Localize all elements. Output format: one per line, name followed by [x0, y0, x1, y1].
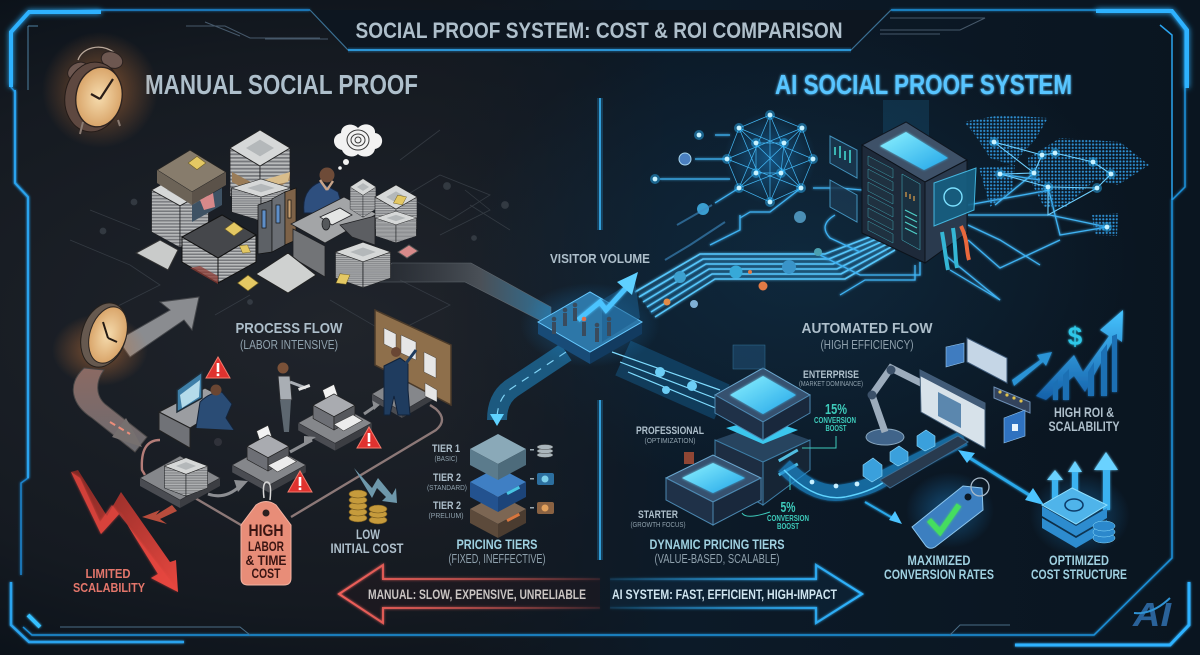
curved arrow from clock into process [73, 368, 147, 452]
label: dynamic pricing tiers [650, 536, 784, 566]
icon: red falling arrow [71, 470, 178, 592]
icon: alarm clock [42, 32, 158, 148]
label: process flow: PROCESS FLOW [236, 320, 343, 337]
arrow to ROI [1012, 352, 1052, 386]
heading: manual social proof: MANUAL SOCIAL PROOF [145, 69, 418, 100]
cables [942, 226, 969, 270]
tier labels and conversion callouts: CONVERSION [814, 416, 856, 425]
tier labels [427, 443, 467, 520]
clock with rising arrow [52, 297, 199, 386]
logo: AI mark: AI [1132, 596, 1172, 633]
pricing tiers stack [427, 434, 554, 538]
label: maximized conversion rates: CONVERSION RATES [884, 566, 994, 582]
red arrow from paper platform [142, 505, 177, 524]
icon: high ROI arrow: $ [1068, 321, 1083, 351]
double arrow to cost structure [865, 450, 1044, 524]
process step: woman with papers [278, 362, 310, 432]
tall paper stack [230, 130, 290, 221]
loose papers and notes [136, 240, 418, 293]
grey path toward visitor volume [375, 263, 551, 326]
label: maximized conversion rates: MAXIMIZED [908, 552, 970, 568]
enterprise block [715, 345, 810, 440]
tier labels and conversion callouts: PROFESSIONAL [636, 425, 704, 437]
heading: AI social proof system: AI SOCIAL PROOF SYSTEM [775, 69, 1072, 100]
process step: printer two [298, 384, 372, 451]
server tower [830, 100, 976, 270]
bottom arrow: AI system: AI SYSTEM: FAST, EFFICIENT, HIGH-IMPACT [612, 586, 837, 602]
low initial cost: LOW [356, 526, 381, 542]
stream nodes [664, 260, 796, 308]
illustration: overwhelming paper piles and stressed worker [136, 124, 551, 326]
tier token icons [530, 444, 554, 514]
blue flow down to pricing tiers [490, 352, 566, 426]
process arrows [208, 400, 385, 496]
ui screens [920, 338, 1030, 448]
middle professional block [715, 418, 810, 505]
paper stack: left [152, 174, 208, 248]
tier labels: TIER 2 [433, 472, 461, 484]
tier labels: TIER 2 [433, 500, 461, 512]
icon: high ROI arrow [1036, 310, 1123, 400]
label: process flow: (LABOR INTENSIVE) [240, 337, 338, 352]
tier labels and conversion callouts: BOOST [777, 522, 799, 531]
label: automated flow: (HIGH EFFICIENCY) [820, 337, 914, 352]
bottom arrow: AI system [610, 565, 862, 623]
tag text [246, 521, 286, 581]
tier 2 block [470, 467, 526, 512]
label: high ROI and scalability: SCALABILITY [1048, 418, 1120, 434]
label: limited scalability [73, 566, 145, 595]
tier labels and conversion callouts: BOOST [826, 424, 847, 433]
glowing curve conveyor [784, 430, 968, 498]
desk paper stacks [350, 179, 417, 243]
main title: SOCIAL PROOF SYSTEM: COST & ROI COMPARISON [356, 18, 842, 43]
data stream: server to visitor platform [635, 235, 895, 317]
visitor volume platform [520, 272, 660, 367]
tier labels and conversion callouts: CONVERSION [767, 514, 809, 523]
process step: printer one [232, 425, 306, 493]
world map [964, 115, 1149, 236]
tier labels and conversion callouts [630, 369, 863, 531]
data stream to enterprise tier [612, 352, 730, 414]
label: pricing tiers: (FIXED, INEFFECTIVE) [448, 551, 546, 566]
label: high ROI and scalability: HIGH ROI & [1054, 404, 1114, 420]
tier labels: (PRELIUM) [428, 511, 464, 520]
label: automated flow [802, 320, 933, 352]
front paper stack [333, 242, 391, 288]
small data cubes [650, 130, 822, 260]
crowd [552, 303, 611, 342]
tier labels and conversion callouts: 15% [825, 401, 847, 418]
tier 3 block [470, 494, 526, 538]
conveyor boxes [863, 430, 935, 482]
tag text: COST [252, 565, 281, 581]
label: optimized cost structure: COST STRUCTURE [1031, 566, 1127, 582]
tier labels and conversion callouts: (MARKET DOMINANCE) [799, 381, 863, 388]
label: optimized cost structure [1031, 552, 1127, 582]
label: process flow [236, 320, 343, 352]
tier labels: TIER 1 [432, 443, 460, 455]
price tag: high labor and time cost [241, 482, 291, 585]
low initial cost [330, 468, 404, 556]
robot arm [866, 366, 935, 445]
tier labels and conversion callouts: 5% [780, 499, 796, 516]
label: pricing tiers [448, 536, 546, 566]
connector loop [142, 405, 442, 525]
worker with head in hands [304, 168, 342, 213]
label: pricing tiers: PRICING TIERS [456, 536, 538, 552]
label: automated flow: AUTOMATED FLOW [802, 320, 933, 337]
desk [291, 197, 377, 277]
icon: maximized conversion tag [906, 472, 994, 548]
tier labels and conversion callouts: (GROWTH FOCUS) [630, 522, 686, 529]
tier labels and conversion callouts: (OPTIMIZATION) [644, 438, 696, 445]
thought bubble [334, 124, 382, 170]
tier labels and conversion callouts: ENTERPRISE [803, 369, 859, 381]
label: limited scalability: SCALABILITY [73, 580, 145, 595]
tag text: HIGH [248, 521, 284, 540]
label: visitor volume: VISITOR VOLUME [550, 251, 650, 266]
bottom arrow: manual [339, 565, 600, 623]
starter block [666, 452, 761, 525]
black binder stack [182, 215, 256, 284]
title panel [186, 10, 985, 52]
center divider [597, 98, 603, 560]
icon: optimized cost money stack [1030, 452, 1130, 557]
folder box on stack [157, 150, 226, 222]
side chart panels [830, 136, 857, 178]
tier labels: (STANDARD) [427, 483, 467, 492]
low initial cost: INITIAL COST [330, 540, 404, 556]
tag text: & TIME [246, 552, 286, 568]
dynamic tier blocks [666, 345, 810, 525]
upright binders [258, 188, 296, 254]
tier 1 block [470, 434, 526, 480]
label: dynamic pricing tiers: DYNAMIC PRICING TIERS [650, 536, 784, 552]
growth arrow [578, 288, 626, 320]
label: high ROI and scalability [1048, 404, 1120, 434]
tier labels: (BASIC) [434, 454, 458, 463]
tag text: LABOR [248, 538, 284, 554]
process step: paper platform [140, 456, 220, 508]
tier labels and conversion callouts: STARTER [638, 509, 678, 521]
process step: office desk [159, 372, 234, 448]
label: optimized cost structure: OPTIMIZED [1049, 552, 1109, 568]
label: maximized conversion rates [884, 552, 994, 582]
neural network [650, 110, 822, 260]
warning icons [206, 357, 381, 492]
label: limited scalability: LIMITED [86, 566, 130, 581]
process step: bulletin board and worker [372, 310, 451, 418]
AI network, map, server links [660, 135, 1107, 300]
label: dynamic pricing tiers: (VALUE-BASED, SCALABLE) [654, 551, 780, 566]
bottom arrow: manual: MANUAL: SLOW, EXPENSIVE, UNRELIABLE [368, 586, 586, 602]
